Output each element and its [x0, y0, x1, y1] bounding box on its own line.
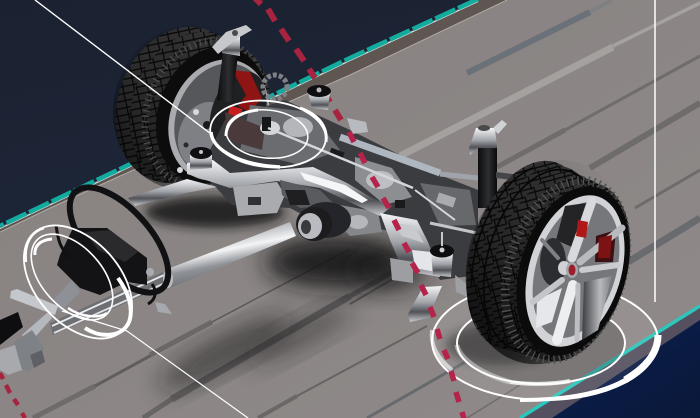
brake caliper [576, 220, 588, 238]
rear brake [232, 70, 262, 112]
front tyre grooves [451, 150, 621, 365]
callout line: steering [62, 311, 248, 418]
shadows under chassis [145, 196, 555, 401]
front shock absorber [469, 120, 520, 208]
rear lower arm [128, 179, 217, 206]
rear wheel [90, 2, 290, 212]
lower right edge [520, 306, 700, 418]
front tyre shading [441, 139, 655, 385]
red dashed centreline [255, 0, 341, 120]
front tyre [445, 146, 651, 376]
propeller shaft [50, 222, 296, 335]
top bracket [347, 118, 368, 134]
ring group: wheel contact [432, 282, 658, 400]
upper rail [340, 137, 440, 173]
bracket below arm [233, 182, 285, 216]
teal edge upper [0, 2, 478, 228]
rear tyre [94, 9, 288, 202]
upper bushing [307, 85, 331, 110]
rear hub face [152, 45, 286, 195]
rim windows [556, 203, 586, 247]
wheel hub badge [558, 261, 570, 275]
gear ring [263, 75, 287, 99]
wheel rim [52, 171, 186, 309]
main arm silver band [187, 160, 392, 216]
dark underbody [200, 100, 478, 280]
rear shock absorber [212, 25, 252, 103]
ring group: suspension [207, 95, 329, 173]
red dashes over frame [349, 132, 464, 418]
steering wheel [52, 171, 186, 309]
wheel hub [57, 228, 147, 295]
rear top bushing [190, 147, 212, 170]
front bushing [430, 232, 454, 277]
ring group: steering [3, 205, 153, 359]
differential [296, 202, 351, 241]
rim spokes [533, 201, 622, 340]
road kerb strip [0, 0, 507, 232]
side tubes [430, 223, 477, 233]
front lower arm [380, 213, 470, 322]
front tyre shoulder [485, 165, 647, 375]
lower left red dashes [0, 373, 25, 418]
callout line: suspension [35, 0, 211, 134]
lower bracket [408, 286, 442, 322]
mottled centre blocks [240, 105, 340, 165]
steering column [0, 280, 80, 375]
callout line: wheel [654, 0, 656, 302]
front wheel [441, 139, 655, 385]
chassis [128, 85, 478, 418]
front rim [508, 183, 642, 359]
rear tyre shoulder [125, 24, 285, 202]
